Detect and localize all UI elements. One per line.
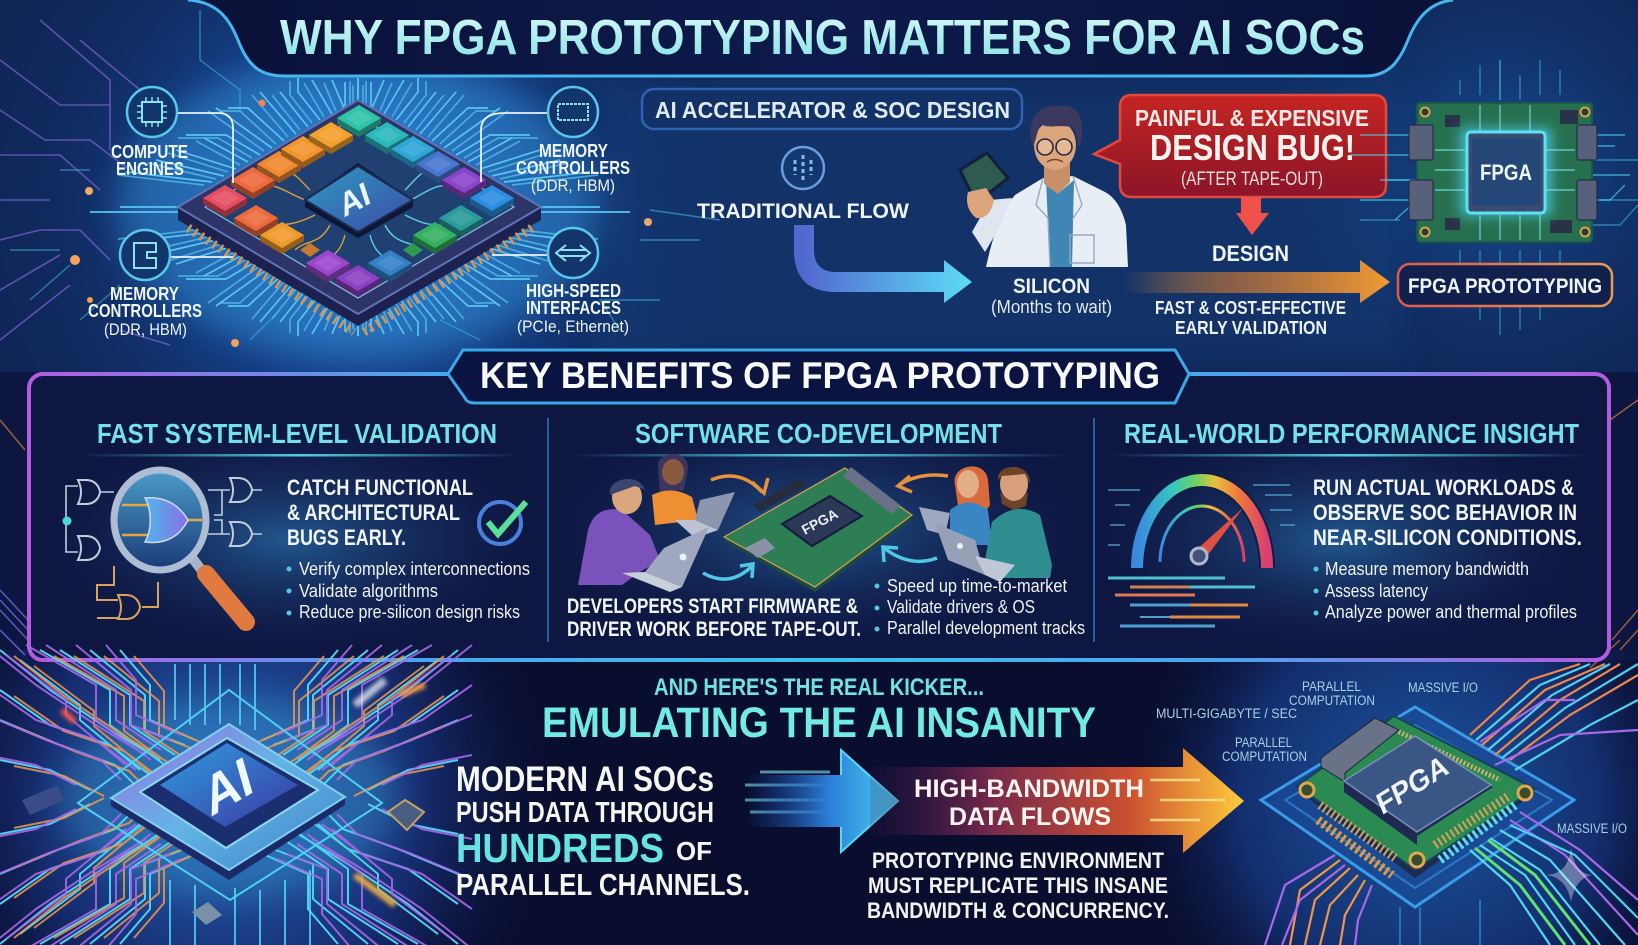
label: high-speed interfaces: HIGH-SPEED	[526, 281, 621, 301]
arrow: high-bandwidth data flows: HIGH-BANDWIDTH	[914, 775, 1144, 803]
engineer holding chip	[960, 106, 1128, 267]
label: high-speed interfaces	[492, 228, 629, 336]
bullet list: Verify complex interconnections	[299, 559, 530, 579]
label: memory controllers top right: CONTROLLERS	[516, 158, 630, 178]
pill: FPGA prototyping	[1398, 264, 1612, 306]
label: high-speed interfaces: (PCIe, Ethernet)	[517, 317, 629, 336]
design flow: DESIGN	[1212, 241, 1289, 266]
bullet list: Measure memory bandwidth	[1325, 559, 1529, 579]
label: compute engines: COMPUTE	[111, 142, 188, 162]
arrow: traditional flow	[794, 225, 972, 303]
AI SoC chip illustration	[178, 100, 541, 332]
label: compute engines: ENGINES	[116, 159, 184, 179]
bullet list: Assess latency	[1325, 581, 1428, 601]
FPGA feature labels: MASSIVE I/O	[1557, 821, 1627, 836]
column: real-world performance insight	[1108, 418, 1582, 626]
arrow: blue data flow	[745, 750, 898, 852]
FPGA feature labels: PARALLEL	[1302, 679, 1361, 694]
column: real-world performance insight: NEAR-SILICON CONDITIONS.	[1313, 525, 1582, 550]
right developers	[919, 466, 1052, 582]
column: real-world performance insight: RUN ACTUAL WORKLOADS &	[1313, 475, 1574, 500]
FPGA development board	[724, 467, 912, 592]
column: software co-development: SOFTWARE CO-DEVELOPMENT	[635, 418, 1002, 449]
column: fast system-level validation: CATCH FUNCTIONAL	[287, 475, 473, 500]
arrow: high-bandwidth data flows	[870, 748, 1244, 853]
heading: key benefits: KEY BENEFITS OF FPGA PROTOTYPING	[480, 355, 1160, 396]
column: real-world performance insight: OBSERVE SOC BEHAVIOR IN	[1313, 500, 1577, 525]
bullet list	[1314, 559, 1577, 622]
label: memory controllers bottom left: CONTROLLERS	[88, 301, 202, 321]
traditional flow: TRADITIONAL FLOW	[697, 200, 909, 223]
column: fast system-level validation: & ARCHITECTURAL	[287, 500, 460, 525]
callout: design bug: (AFTER TAPE-OUT)	[1181, 169, 1323, 190]
text block: prototyping environment: BANDWIDTH & CONCURRENCY.	[867, 898, 1169, 923]
FPGA feature labels: COMPUTATION	[1289, 693, 1375, 708]
callout: design bug: DESIGN BUG!	[1150, 127, 1355, 168]
silicon label: SILICON	[1013, 275, 1090, 298]
text block: prototyping environment: PROTOTYPING ENVIRONMENT	[872, 848, 1164, 873]
design flow: EARLY VALIDATION	[1175, 318, 1327, 338]
text block: modern AI SoCs: MODERN AI SOCs	[456, 760, 714, 799]
bullet list: Analyze power and thermal profiles	[1325, 602, 1577, 622]
bullet list: Validate algorithms	[299, 581, 438, 601]
column: software co-development: DRIVER WORK BEFORE TAPE-OUT.	[567, 618, 861, 641]
callout: design bug	[1094, 95, 1386, 197]
label: memory controllers top right	[481, 87, 630, 195]
gauge	[1108, 480, 1295, 626]
label: compute engines	[111, 87, 233, 183]
column: software co-development: DEVELOPERS START FIRMWARE &	[567, 595, 858, 618]
FPGA feature labels: MASSIVE I/O	[1408, 680, 1478, 695]
arrow: high-bandwidth data flows: DATA FLOWS	[949, 803, 1111, 831]
FPGA feature labels: COMPUTATION	[1222, 749, 1307, 764]
title banner	[188, 0, 1453, 76]
bottom right circuit bundles	[1261, 664, 1638, 945]
icon: traditional flow	[782, 147, 824, 189]
compute blocks	[203, 105, 514, 297]
column: fast system-level validation: FAST SYSTEM-LEVEL VALIDATION	[97, 418, 497, 449]
panel: key benefits	[29, 350, 1609, 660]
arrow: FPGA flow	[1125, 260, 1390, 303]
label: memory controllers top right: MEMORY	[539, 141, 608, 161]
pill: FPGA prototyping: FPGA PROTOTYPING	[1408, 275, 1602, 298]
icon: check mark	[479, 502, 526, 544]
label: memory controllers bottom left: (DDR, HBM)	[104, 320, 187, 339]
silicon label	[991, 275, 1112, 317]
bullet list: Speed up time-to-market	[887, 576, 1067, 596]
text block: prototyping environment: MUST REPLICATE THIS INSANE	[868, 873, 1168, 898]
top chip glow and circuit fan	[70, 57, 652, 357]
FPGA feature labels: MULTI-GIGABYTE / SEC	[1156, 706, 1297, 721]
bullet list	[874, 576, 1085, 638]
icon: logic gates	[62, 478, 262, 619]
icon: sparkle watermark	[1546, 848, 1592, 902]
bullet list: Validate drivers & OS	[887, 597, 1035, 617]
silicon label: (Months to wait)	[991, 297, 1112, 317]
FPGA feature labels	[1156, 679, 1627, 836]
text block: modern AI SoCs	[456, 760, 750, 902]
text block: modern AI SoCs: OF	[676, 836, 712, 866]
FPGA board: FPGA	[1480, 160, 1532, 185]
bullet list: Parallel development tracks	[887, 618, 1085, 638]
design flow	[1125, 241, 1390, 338]
text block: modern AI SoCs: PARALLEL CHANNELS.	[456, 867, 750, 902]
column: fast system-level validation: BUGS EARLY.	[287, 525, 406, 550]
label: memory controllers top right: (DDR, HBM)	[531, 176, 615, 195]
chip pins	[188, 228, 532, 332]
bullet list: Reduce pre-silicon design risks	[299, 602, 520, 622]
FPGA board	[1350, 60, 1630, 242]
label: memory controllers bottom left: MEMORY	[110, 284, 179, 304]
callout: design bug: PAINFUL & EXPENSIVE	[1135, 105, 1369, 131]
icon: magnifying glass	[114, 470, 246, 622]
central AI die	[305, 163, 413, 238]
bottom left circuit bundles	[0, 645, 472, 945]
heading: real kicker	[542, 674, 1096, 747]
heading pill: AI accelerator and SoC design: AI ACCELERATOR & SOC DESIGN	[655, 97, 1010, 123]
AI chip, bottom left: AI	[197, 745, 259, 829]
design flow: FAST & COST-EFFECTIVE	[1155, 298, 1346, 318]
arrow: bug to design	[1236, 197, 1269, 235]
traditional flow	[697, 147, 972, 303]
chip traces	[255, 171, 345, 265]
heading: real kicker: EMULATING THE AI INSANITY	[542, 699, 1096, 747]
column: software co-development	[567, 418, 1085, 641]
heading: real kicker: AND HERE'S THE REAL KICKER...	[654, 674, 984, 701]
text block: prototyping environment	[867, 848, 1169, 923]
AI chip, bottom left	[111, 724, 345, 880]
text block: modern AI SoCs: PUSH DATA THROUGH	[456, 797, 714, 829]
label: high-speed interfaces: INTERFACES	[526, 298, 621, 318]
label: memory controllers bottom left	[88, 230, 233, 339]
FPGA development board: FPGA	[799, 505, 841, 538]
arrows: data exchange	[703, 475, 948, 579]
text block: modern AI SoCs: HUNDREDS	[456, 825, 664, 871]
FPGA chip, bottom right	[1297, 716, 1535, 878]
heading pill: AI accelerator and SoC design	[642, 89, 1022, 129]
title: WHY FPGA PROTOTYPING MATTERS FOR AI SOCs	[280, 11, 1365, 65]
FPGA feature labels: PARALLEL	[1235, 735, 1292, 750]
column: fast system-level validation	[62, 418, 530, 622]
bullet list	[286, 559, 530, 622]
left developers	[578, 454, 735, 592]
FPGA chip, bottom right: FPGA	[1372, 749, 1453, 822]
AI SoC chip illustration: AI	[335, 175, 374, 224]
